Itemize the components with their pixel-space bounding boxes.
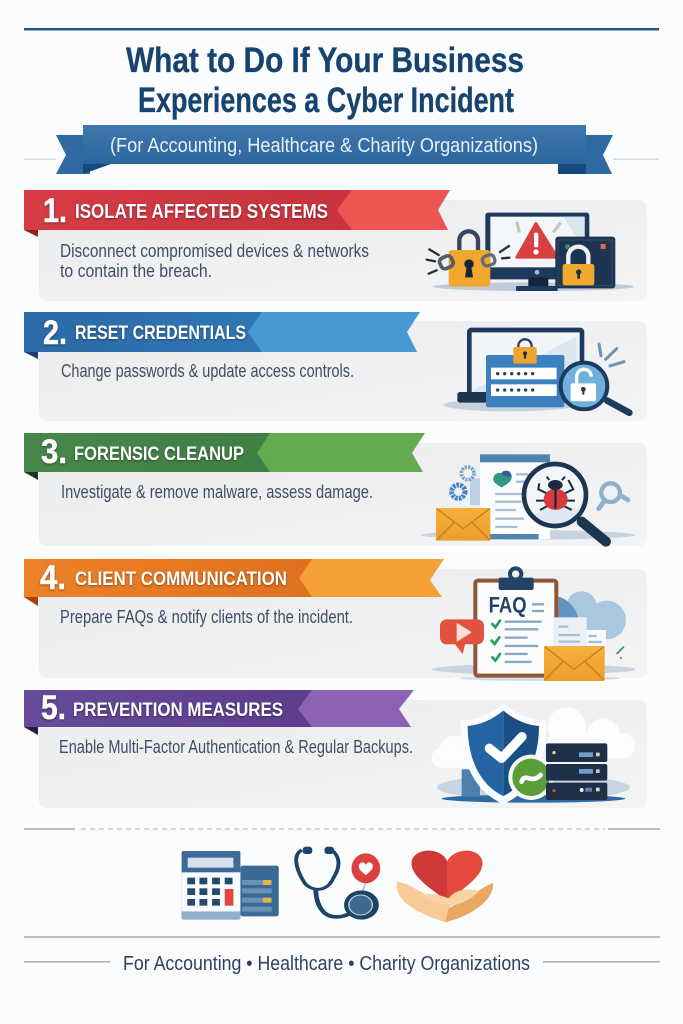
description: step 2: Change passwords & update access controls.: [61, 361, 354, 381]
footer strip: For Accounting • Healthcare • Charity Organizations: [123, 953, 530, 975]
ribbon: step 5: PREVENTION MEASURES: [73, 700, 283, 721]
description: step 4: Prepare FAQs & notify clients of the incident.: [60, 607, 353, 627]
label: FAQ: FAQ: [489, 593, 527, 618]
ribbon: step 2: [24, 312, 420, 359]
title: Experiences a Cyber Incident: [138, 81, 514, 120]
ribbon: step 3: 3.: [41, 433, 67, 471]
description: step 1: Disconnect compromised devices & networks: [60, 241, 369, 261]
icon: stethoscope: [296, 847, 380, 920]
subtitle ribbon: [56, 125, 613, 174]
ribbon: step 3: FORENSIC CLEANUP: [74, 444, 244, 465]
ribbon: step 4: CLIENT COMMUNICATION: [75, 569, 287, 590]
description: step 1: to contain the breach.: [60, 261, 212, 281]
ribbon: step 4: 4.: [40, 559, 66, 597]
title: What to Do If Your Business: [126, 41, 524, 80]
ribbon: step 1: 1.: [43, 192, 67, 230]
ribbon: step 5: 5.: [41, 689, 66, 727]
ribbon: step 1: ISOLATE AFFECTED SYSTEMS: [75, 201, 328, 223]
ribbon: step 5: [24, 689, 414, 735]
ribbon: step 2: RESET CREDENTIALS: [75, 323, 246, 344]
ribbon: step 2: 2.: [43, 314, 67, 352]
panel: step 5 prevention measures: [24, 689, 647, 808]
title: [126, 41, 524, 120]
description: step 5: Enable Multi-Factor Authentication & Regular Backups.: [59, 737, 413, 757]
panel: step 3 forensic cleanup: [24, 433, 647, 546]
ribbon: step 3: [24, 433, 425, 480]
ribbon: step 1: [24, 190, 450, 237]
icon: locks and monitor warning: [427, 213, 634, 291]
icon: heart in hands: [397, 851, 493, 922]
panel: step 4 client communication: [24, 559, 647, 681]
panel: step 1 isolate affected systems: [24, 190, 647, 301]
panel: step 2 reset credentials: [24, 312, 647, 421]
icon: calculator: [182, 851, 279, 919]
description: step 3: Investigate & remove malware, assess damage.: [61, 482, 373, 502]
icon: shield, cloud and servers: [432, 703, 635, 804]
icon: document, bug magnifier and envelope: [421, 454, 636, 542]
description: step 1: [60, 241, 369, 281]
subtitle ribbon: (For Accounting, Healthcare & Charity Organizations): [110, 135, 538, 157]
icon: FAQ clipboard, video bubble and envelope: [431, 568, 635, 681]
ribbon: step 4: [24, 559, 444, 606]
icon: laptop login and magnifier: [443, 330, 629, 413]
